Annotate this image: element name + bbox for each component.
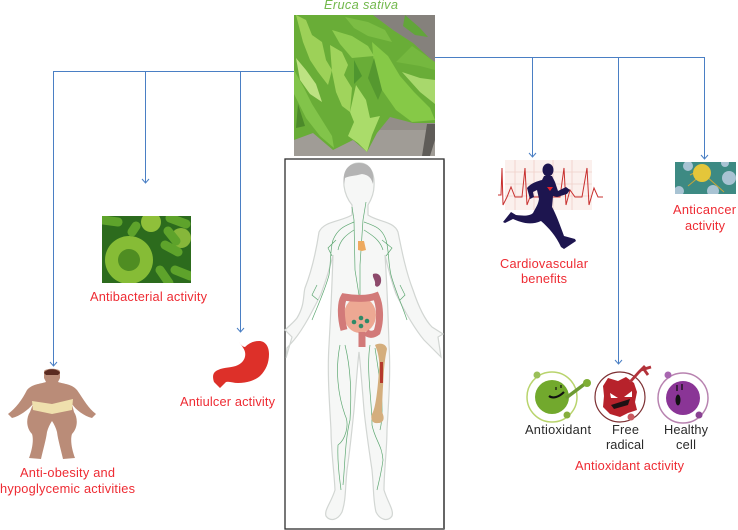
labels: molecule captions: Antioxidant bbox=[525, 422, 591, 437]
labels: molecule captions: cell bbox=[676, 437, 696, 452]
label: antibacterial activity: Antibacterial activity bbox=[90, 289, 208, 304]
ECG grid bbox=[505, 160, 592, 210]
icon: antioxidant molecule bbox=[527, 372, 591, 422]
hair bbox=[344, 163, 373, 184]
label: antiulcer activity: Antiulcer activity bbox=[180, 394, 276, 409]
icon: free radical bbox=[595, 366, 651, 422]
label: anticancer activity: Anticancer bbox=[673, 202, 737, 217]
labels: molecule captions: radical bbox=[606, 437, 644, 452]
image: arugula leaves bbox=[294, 15, 435, 156]
labels: molecule captions: Healthy bbox=[664, 422, 709, 437]
small intestine bbox=[344, 297, 376, 333]
colon bbox=[341, 296, 380, 347]
panel: human body lymphatic figure bbox=[285, 159, 445, 529]
label: anticancer activity bbox=[673, 202, 737, 233]
labels: molecule captions: Free bbox=[612, 422, 639, 437]
bone marrow bbox=[380, 362, 383, 383]
icon: healthy cell bbox=[658, 372, 708, 423]
ECG trace bbox=[498, 168, 603, 205]
label: cardiovascular benefits: benefits bbox=[521, 271, 567, 286]
thymus bbox=[358, 241, 366, 251]
label: antioxidant activity: Antioxidant activity bbox=[575, 458, 685, 473]
spleen bbox=[373, 273, 381, 287]
femur bone bbox=[371, 344, 387, 423]
label: cardiovascular benefits: Cardiovascular bbox=[500, 256, 589, 271]
label: cardiovascular benefits bbox=[500, 256, 589, 286]
lymph nodes bbox=[352, 316, 369, 328]
label: anti-obesity and hypoglycemic: hypoglycemic activities bbox=[0, 481, 135, 496]
lymphatic vessels bbox=[312, 202, 407, 490]
icon: stomach bbox=[213, 341, 269, 388]
icon: runner with ECG bbox=[498, 160, 603, 249]
heart bbox=[547, 187, 553, 191]
runner silhouette bbox=[503, 164, 576, 249]
image: cancer cell bbox=[675, 162, 736, 194]
label: anti-obesity and hypoglycemic bbox=[0, 465, 135, 496]
icon: obese figure bbox=[8, 369, 96, 459]
label: anti-obesity and hypoglycemic: Anti-obesity and bbox=[20, 465, 115, 480]
arrows: right branch bbox=[435, 58, 708, 364]
labels: molecule captions bbox=[525, 422, 709, 452]
arrows: left branch bbox=[50, 72, 294, 366]
body silhouette bbox=[285, 163, 443, 519]
image: bacteria bbox=[102, 212, 191, 284]
label: anticancer activity: activity bbox=[685, 218, 726, 233]
